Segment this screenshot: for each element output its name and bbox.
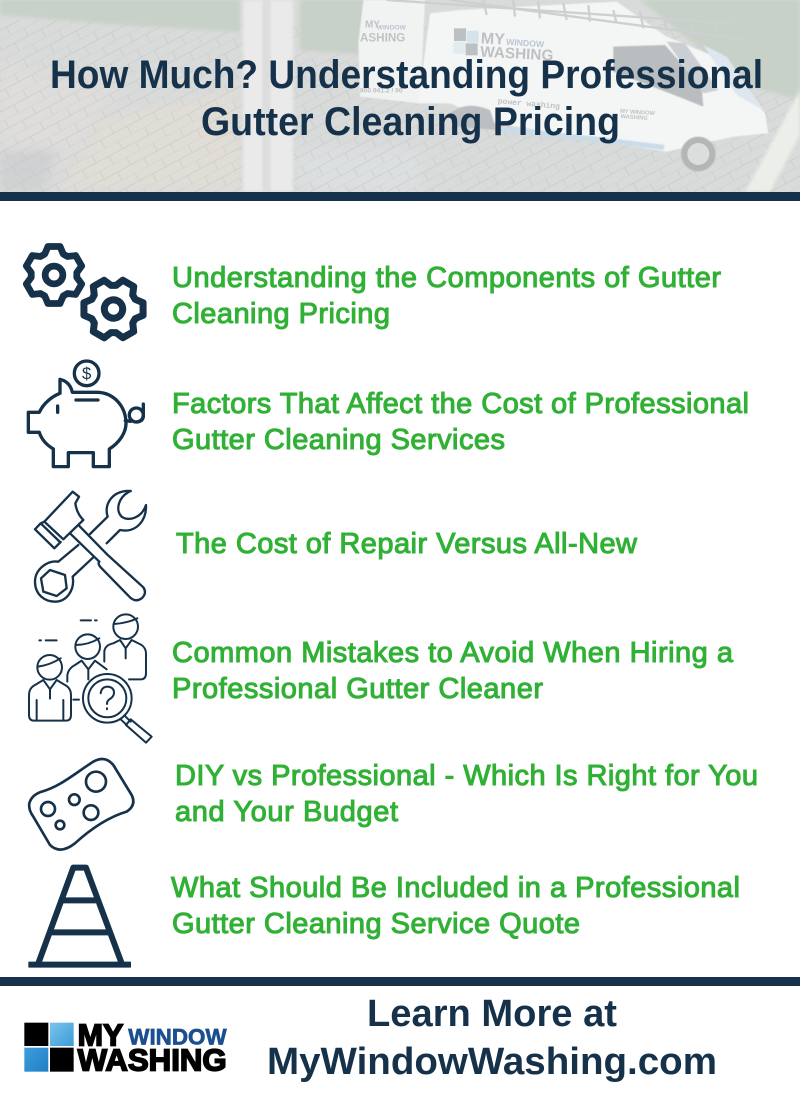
van: WINDOW [377,24,407,31]
heading: common mistakes [172,637,734,705]
header photo background [0,0,800,192]
heading: common mistakes: Professional Gutter Cleaner [172,673,543,705]
icon: gears [26,247,153,349]
icon: traffic cone [28,868,131,968]
window frame post [243,0,293,192]
heading: diy vs professional: DIY vs Professional - Which Is Right for You [175,760,758,792]
van: WINDOW [506,37,545,49]
footer call to action: Learn More at [367,993,617,1035]
logo: WASHING [78,1043,227,1078]
title [50,53,763,144]
heading: common mistakes: Common Mistakes to Avoid When Hiring a [172,637,734,669]
logo [24,1018,227,1078]
heading: diy vs professional [175,760,758,828]
heading: factors: Factors That Affect the Cost of Professional [172,388,749,420]
van: ASHING [360,31,405,44]
icon: piggy bank [28,361,143,467]
bottom divider bar [0,977,800,986]
icon: piggy bank: $ [82,364,91,383]
heading: components: Cleaning Pricing [172,298,390,330]
van: MY [480,30,506,49]
heading: components [172,262,721,330]
heading: diy vs professional: and Your Budget [175,796,398,828]
van: MY WINDOW [620,109,656,117]
heading: included in quote [171,872,740,940]
van: WASHING [621,114,648,122]
top divider bar [0,192,800,201]
footer call to action [267,993,717,1083]
heading: repair versus new: The Cost of Repair Versus All-New [176,528,638,560]
right window frame [745,90,800,192]
heading: components: Understanding the Components of Gutter [172,262,721,294]
ladder rack [387,0,742,39]
footer call to action: MyWindowWashing.com [267,1041,717,1083]
icon: sponge [29,759,133,850]
heading: factors [172,388,749,456]
van: 800.941.2 / 90 [360,88,403,95]
van logo marks [454,28,466,41]
title: How Much? Understanding Professional [50,53,763,97]
heading: included in quote: Gutter Cleaning Service Quote [172,908,580,940]
logo: MY [78,1018,124,1053]
van: MY [365,19,380,30]
icon: people with magnifier [29,614,152,743]
van: power washing [497,97,560,112]
icon: hammer and wrench [35,491,146,602]
title: Gutter Cleaning Pricing [201,100,620,144]
van: WASHING [480,44,554,64]
van [358,0,768,171]
logo: WINDOW [128,1025,227,1050]
wheels [681,137,716,171]
heading: included in quote: What Should Be Included in a Professional [171,872,740,904]
heading: factors: Gutter Cleaning Services [172,424,505,456]
